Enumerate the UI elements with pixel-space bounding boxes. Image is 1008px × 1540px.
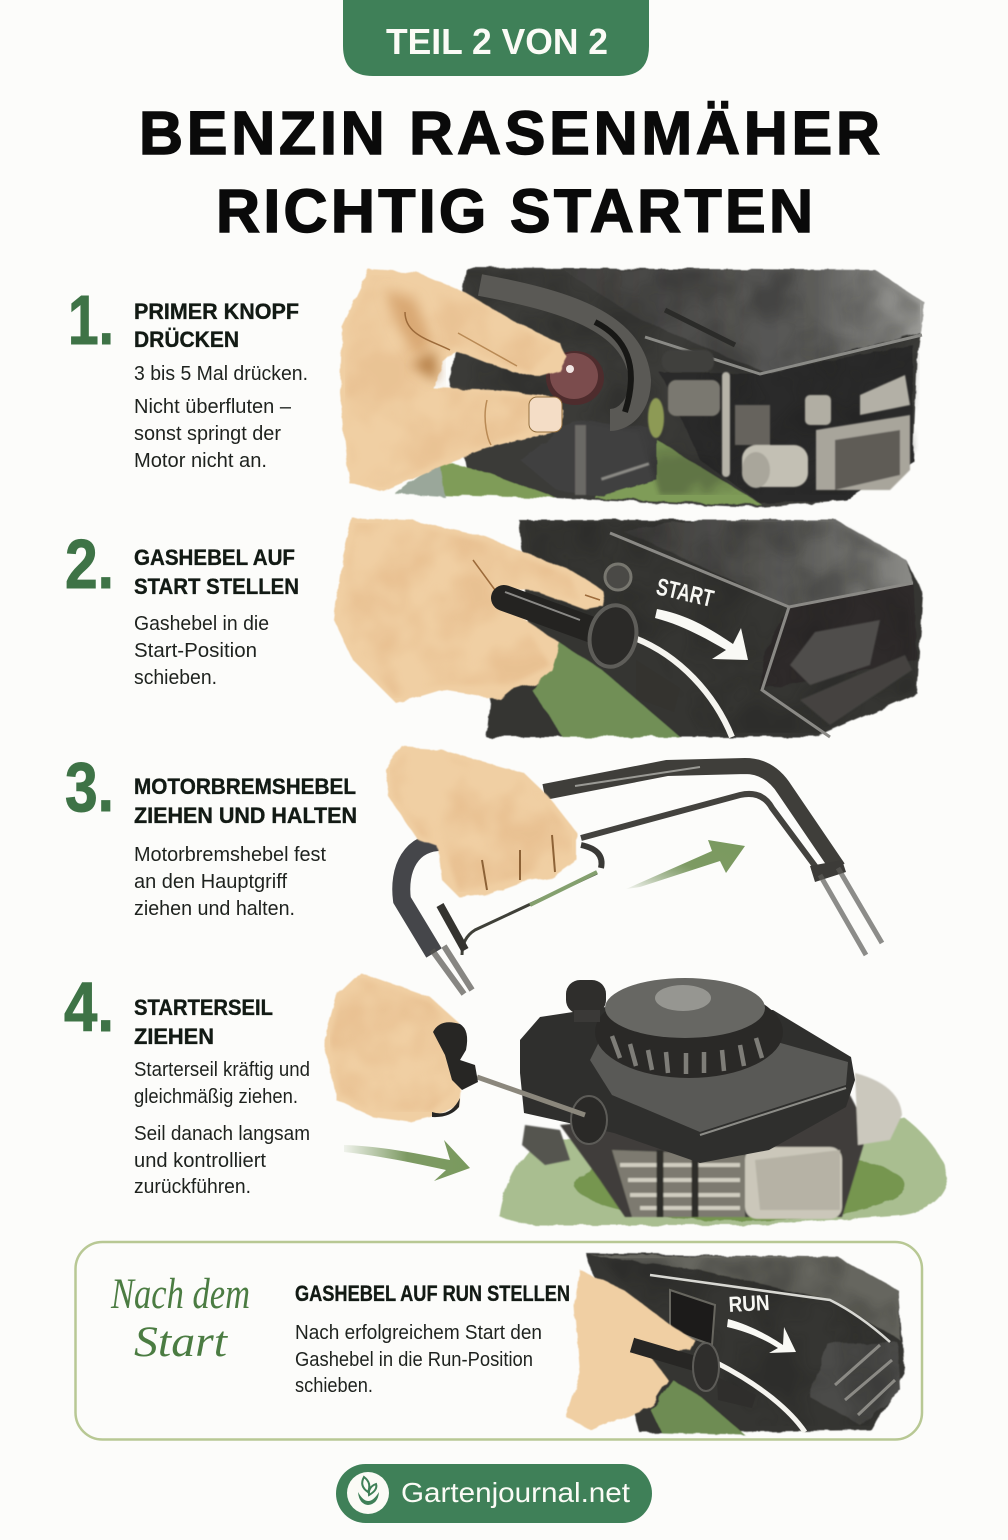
- panel body text: [295, 1322, 542, 1397]
- pulley guide: [571, 1096, 607, 1144]
- title: [139, 99, 880, 245]
- lever slot: [670, 1290, 715, 1345]
- lever handle: [632, 1343, 719, 1391]
- body step 3: an den Hauptgriff: [134, 871, 287, 893]
- mower deck: [500, 1117, 948, 1225]
- step 4 text: [64, 968, 310, 1198]
- body step 4: gleichmäßig ziehen.: [134, 1086, 298, 1108]
- body step 2: Start-Position: [134, 640, 257, 662]
- brake lever wire: [440, 845, 602, 955]
- step 1 text: [68, 281, 308, 472]
- main handle bar: [544, 766, 882, 955]
- pivot: [605, 564, 631, 590]
- white cable: [632, 637, 732, 737]
- body step 1: [134, 363, 308, 472]
- script heading: [110, 1271, 250, 1366]
- label RUN: RUN: [728, 1290, 770, 1317]
- hand: [334, 518, 604, 703]
- panel heading: GASHEBEL AUF RUN STELLEN: [295, 1281, 570, 1306]
- number 2: 2.: [65, 525, 114, 603]
- footer pill: Gartenjournal.net: [336, 1464, 652, 1523]
- vent: [790, 620, 912, 725]
- engine parts: [575, 350, 910, 495]
- heading step 3: [134, 774, 357, 828]
- illustration step 2: hand on throttle lever: [334, 518, 923, 737]
- body step 4: Starterseil kräftig und: [134, 1059, 310, 1081]
- body step 1: Nicht überfluten –: [134, 396, 292, 418]
- number 3: 3.: [65, 748, 114, 826]
- step 2 text: [65, 525, 299, 689]
- starter rope: [477, 1077, 585, 1115]
- left grip tube: [401, 842, 472, 994]
- heading step 3: MOTORBREMSHEBEL: [134, 774, 356, 799]
- body step 4: [134, 1059, 310, 1198]
- arrow white: [655, 609, 748, 660]
- title: BENZIN RASENMÄHER: [139, 99, 880, 167]
- starter dome: [595, 978, 783, 1078]
- white cable: [717, 1363, 805, 1432]
- body step 4: zurückführen.: [134, 1176, 251, 1198]
- heading step 1: PRIMER KNOPF: [134, 299, 299, 324]
- body step 3: [134, 844, 326, 920]
- starter grip: [432, 1022, 478, 1117]
- body step 3: Motorbremshebel fest: [134, 844, 326, 866]
- body step 1: sonst springt der: [134, 423, 281, 445]
- badge: Teil 2 von 2: TEIL 2 VON 2: [386, 21, 608, 62]
- body step 4: und kontrolliert: [134, 1150, 266, 1172]
- heading step 4: ZIEHEN: [134, 1024, 214, 1049]
- lever handle: [504, 592, 642, 671]
- hand: [385, 747, 577, 897]
- primer button: [546, 351, 604, 405]
- green arrow: [344, 1140, 470, 1181]
- script heading: Nach dem: [110, 1271, 250, 1318]
- script heading: Start: [134, 1319, 228, 1366]
- body step 1: Motor nicht an.: [134, 450, 267, 472]
- panel body text: Nach erfolgreichem Start den: [295, 1322, 542, 1344]
- body step 4: Seil danach langsam: [134, 1123, 310, 1145]
- green arrow: [626, 840, 745, 889]
- heading step 2: GASHEBEL AUF: [134, 545, 295, 570]
- heading step 1: DRÜCKEN: [134, 327, 239, 352]
- footer pill: Gartenjournal.net: Gartenjournal.net: [401, 1477, 630, 1508]
- body step 2: [134, 613, 269, 689]
- hand: [340, 270, 567, 492]
- engine housing: [520, 1007, 855, 1163]
- heading step 1: [134, 299, 299, 352]
- illustration step 3: hand on brake lever: [385, 747, 882, 994]
- heading step 3: ZIEHEN UND HALTEN: [134, 803, 357, 828]
- illustration: lever to run position: [566, 1253, 904, 1435]
- number 4: 4.: [64, 968, 114, 1046]
- title: RICHTIG STARTEN: [216, 177, 813, 245]
- step 3 text: [65, 748, 357, 920]
- heading step 4: STARTERSEIL: [134, 995, 273, 1020]
- body step 2: Gashebel in die: [134, 613, 269, 635]
- illustration step 1: hand pressing primer button: [340, 268, 925, 507]
- panel: after start: [76, 1242, 922, 1440]
- lever tab: [717, 1377, 756, 1408]
- icon: plant logo: [347, 1472, 389, 1514]
- heading step 2: [134, 545, 299, 599]
- fuel cap: [566, 980, 606, 1022]
- illustration step 4: pulling starter rope: [324, 973, 948, 1225]
- hand: [324, 973, 461, 1122]
- number 1: 1.: [68, 281, 114, 359]
- engine lower: [522, 1073, 902, 1219]
- heading step 4: [134, 995, 273, 1049]
- badge: Teil 2 von 2: [343, 0, 649, 76]
- label START: START: [654, 574, 716, 613]
- body step 2: schieben.: [134, 667, 217, 689]
- arrow white: [727, 1319, 796, 1353]
- hand: [566, 1270, 695, 1430]
- panel body text: Gashebel in die Run-Position: [295, 1349, 533, 1371]
- heading step 2: START STELLEN: [134, 574, 299, 599]
- panel body text: schieben.: [295, 1375, 373, 1397]
- lever tab: [636, 660, 680, 712]
- body step 1: 3 bis 5 Mal drücken.: [134, 363, 308, 385]
- body step 3: ziehen und halten.: [134, 898, 295, 920]
